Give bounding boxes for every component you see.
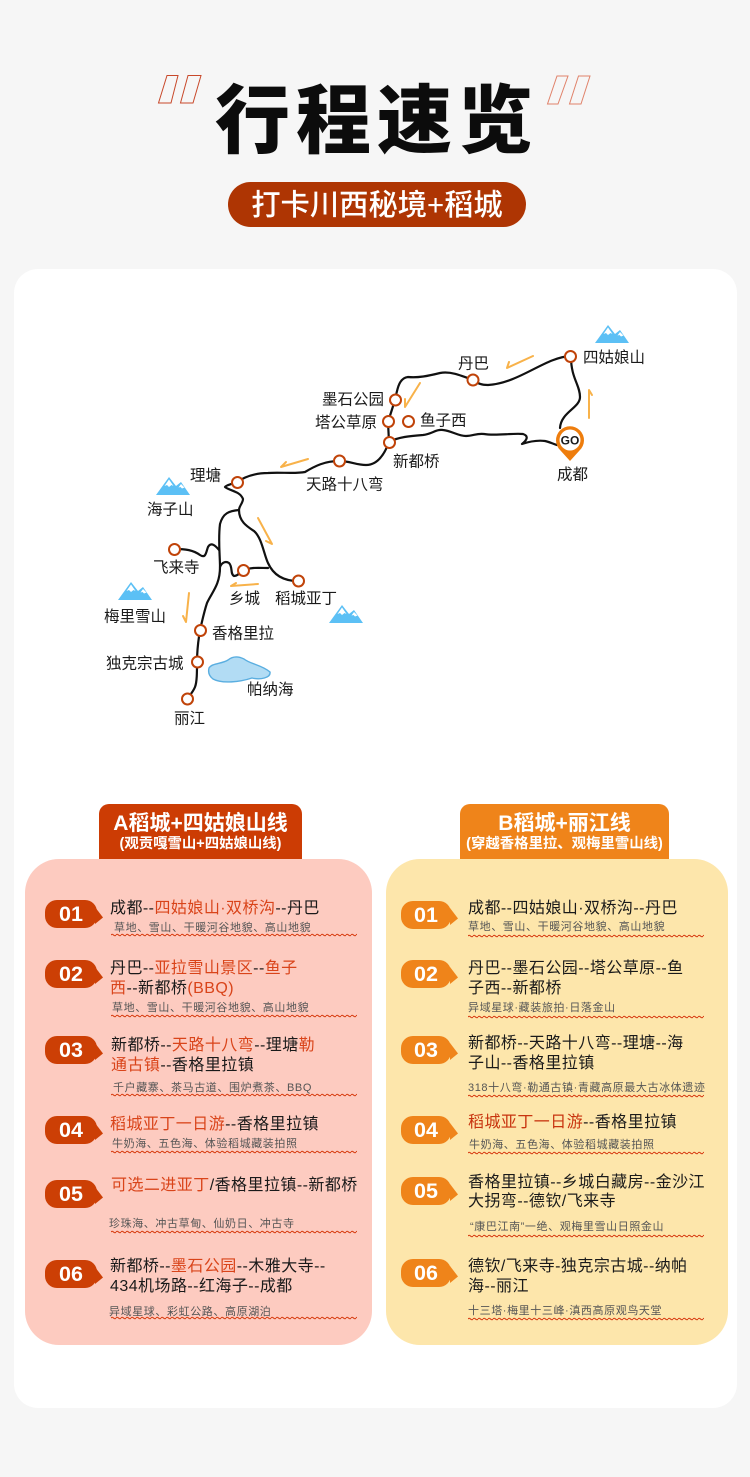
subtitle pill: 打卡川西秘境+稻城 (251, 189, 503, 222)
panel: route A: 434机场路--红海子--成都 (110, 1278, 293, 1295)
panel: route A: 通古镇--香格里拉镇 (111, 1057, 254, 1074)
map place labels: 独克宗古城 (106, 654, 184, 672)
B day 04 (401, 1116, 451, 1144)
B day 06: 06 (414, 1261, 438, 1285)
B day 02: 02 (414, 962, 438, 986)
panel: route A: 丹巴--亚拉雪山景区--鱼子 (110, 960, 298, 977)
A day 06 (45, 1260, 97, 1288)
route A header: (观贡嘎雪山+四姑娘山线) (120, 836, 281, 852)
B day 06 (401, 1259, 451, 1287)
B day 04: 04 (414, 1118, 438, 1142)
map place labels: 天路十八弯 (306, 476, 384, 494)
panel: route A: 成都--四姑娘山·双桥沟--丹巴 (110, 900, 320, 917)
panel: white card (14, 269, 737, 1408)
route map (104, 325, 645, 728)
panel: route A: 新都桥--墨石公园--木雅大寺-- (110, 1258, 326, 1275)
route A header: A稻城+四姑娘山线 (113, 812, 288, 835)
panel: route A: 草地、雪山、干暖河谷地貌、高山地貌 (114, 922, 311, 934)
B day 03 (401, 1036, 451, 1064)
map place labels: 理塘 (190, 466, 221, 484)
A day 05: 05 (59, 1182, 83, 1206)
panel: route B: 十三塔·梅里十三峰·滇西高原观鸟天堂 (468, 1305, 662, 1317)
route B header: (穿越香格里拉、观梅里雪山线) (466, 836, 663, 852)
A day 03: 03 (59, 1038, 83, 1062)
panel: route A: 西--新都桥(BBQ) (110, 980, 234, 997)
title: 行程速览 (215, 79, 539, 163)
A day 02 (45, 960, 97, 988)
B day 01: 01 (414, 903, 438, 927)
panel: route B: 成都--四姑娘山·双桥沟--丹巴 (468, 900, 678, 917)
panel: route A: 千户藏寨、茶马古道、围炉煮茶、BBQ (113, 1082, 312, 1094)
direction arrows (183, 356, 592, 622)
map place labels: 成都 (557, 466, 588, 484)
panel: route B (386, 804, 728, 1345)
map place labels: 香格里拉 (212, 624, 274, 642)
panel: route A (25, 804, 372, 1345)
icon: GO start pin (556, 426, 584, 461)
route B body (386, 859, 728, 1345)
A day 01 (45, 900, 97, 928)
panel: route B: 丹巴--墨石公园--塔公草原--鱼 (468, 960, 684, 977)
map place labels: 梅里雪山 (104, 608, 166, 626)
map place labels (104, 348, 645, 728)
panel: route B: 子山--香格里拉镇 (468, 1055, 595, 1072)
route lines (174, 356, 580, 699)
A day 04: 04 (59, 1118, 83, 1142)
B day 05 (401, 1177, 451, 1205)
A day 02: 02 (59, 962, 83, 986)
map place labels: 丽江 (174, 710, 205, 728)
B day 05: 05 (414, 1179, 438, 1203)
icon: lake (209, 657, 270, 682)
panel: route B: 草地、雪山、干暖河谷地貌、高山地貌 (468, 921, 665, 933)
map place labels: 飞来寺 (153, 558, 200, 576)
panel: route B: 318十八弯·勒通古镇·青藏高原最大古冰体遗迹 (468, 1082, 705, 1094)
route B header (460, 804, 669, 864)
A day 04 (45, 1116, 97, 1144)
panel: route A: 草地、雪山、干暖河谷地貌、高山地貌 (112, 1002, 309, 1014)
panel: route B: “康巴江南”一绝、观梅里雪山日照金山 (470, 1221, 664, 1233)
route A header (99, 804, 302, 864)
A day 06: 06 (59, 1262, 83, 1286)
map place labels: 乡城 (229, 590, 261, 608)
panel: route B: 子西--新都桥 (468, 980, 562, 997)
panel: route B: 异域星球·藏装旅拍·日落金山 (468, 1002, 616, 1014)
map place labels: 新都桥 (393, 452, 440, 470)
route stop markers (169, 351, 576, 704)
map place labels: 塔公草原 (315, 414, 377, 432)
map place labels: 稻城亚丁 (275, 590, 337, 608)
panel: route A: 可选二进亚丁/香格里拉镇--新都桥 (111, 1177, 358, 1194)
panel: route B: 牛奶海、五色海、体验稻城藏装拍照 (469, 1139, 655, 1151)
A day 01: 01 (59, 902, 83, 926)
panel: route B: 德钦/飞来寺-独克宗古城--纳帕 (468, 1258, 688, 1275)
icon: GO start pin: GO (561, 434, 579, 448)
panel: route A: 稻城亚丁一日游--香格里拉镇 (110, 1116, 319, 1133)
map place labels: 四姑娘山 (583, 348, 645, 366)
B day 03: 03 (414, 1038, 438, 1062)
panel: route B: 海--丽江 (468, 1278, 529, 1295)
map place labels: 墨石公园 (322, 392, 384, 408)
panel: route A: 珍珠海、冲古草甸、仙奶日、冲古寺 (109, 1218, 295, 1230)
panel: route B: 大拐弯--德钦/飞来寺 (468, 1193, 616, 1210)
A day 03 (45, 1036, 97, 1064)
B day 01 (401, 901, 451, 929)
route B header: B稻城+丽江线 (498, 812, 631, 835)
panel: route A: 异域星球、彩虹公路、高原湖泊 (109, 1306, 271, 1318)
panel: route A: 牛奶海、五色海、体验稻城藏装拍照 (112, 1138, 298, 1150)
panel: route B: 香格里拉镇--乡城白藏房--金沙江 (468, 1174, 705, 1191)
icon: mountains (118, 325, 629, 623)
route A body (25, 859, 372, 1345)
decorative quote marks left (158, 75, 202, 104)
map place labels: 鱼子西 (420, 412, 467, 430)
A day 05 (45, 1180, 97, 1208)
B day 02 (401, 960, 451, 988)
panel: route B: 新都桥--天路十八弯--理塘--海 (468, 1035, 684, 1052)
map place labels: 海子山 (147, 500, 194, 518)
panel: route A: 新都桥--天路十八弯--理塘勒 (111, 1037, 315, 1054)
map place labels: 丹巴 (458, 356, 489, 372)
panel: route B: 稻城亚丁一日游--香格里拉镇 (468, 1114, 677, 1131)
map place labels: 帕纳海 (247, 680, 294, 698)
subtitle pill (228, 182, 526, 227)
decorative quote marks right (546, 76, 591, 104)
